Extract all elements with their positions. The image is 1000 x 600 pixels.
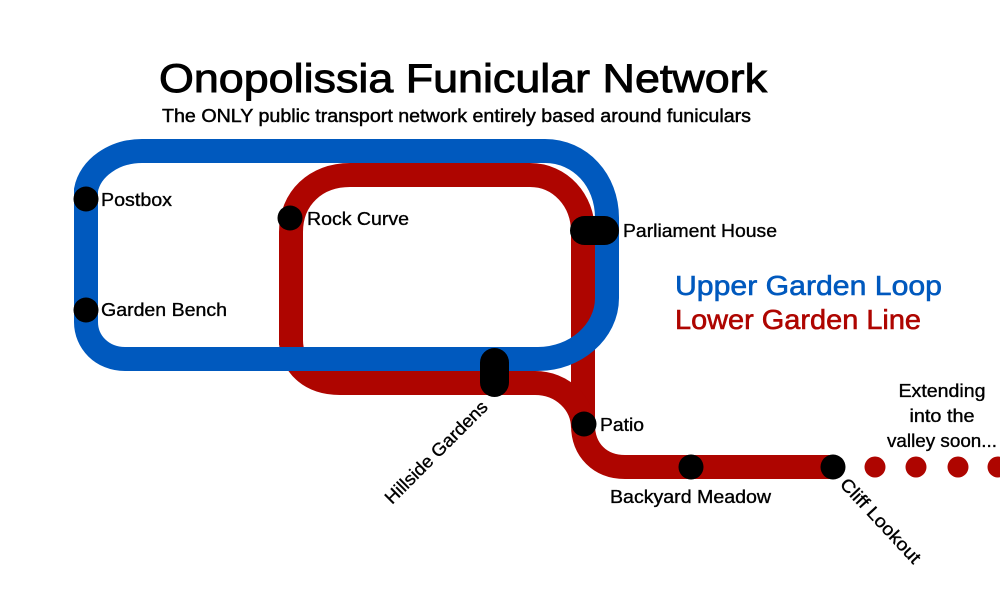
station: Hillside Gardens xyxy=(381,348,509,508)
station: Garden Bench xyxy=(74,298,227,322)
extension note: valley soon... xyxy=(887,431,997,451)
station: Parliament House xyxy=(570,216,777,245)
station: Postbox xyxy=(74,186,172,212)
extension note: Extending xyxy=(898,381,986,401)
extension note xyxy=(887,381,997,451)
lower garden line: red route xyxy=(291,175,833,467)
title: Onopolissia Funicular Network xyxy=(159,57,768,101)
subtitle: The ONLY public transport network entirely based around funiculars xyxy=(162,106,751,126)
station: Garden Bench: Garden Bench xyxy=(101,300,227,320)
legend: Upper Garden Loop xyxy=(675,270,942,301)
station: Cliff Lookout xyxy=(820,454,925,567)
station: Patio xyxy=(572,412,644,436)
upper garden loop: blue route xyxy=(86,151,607,359)
station: Cliff Lookout: Cliff Lookout xyxy=(836,474,925,567)
station: Rock Curve xyxy=(278,206,409,230)
station: Rock Curve: Rock Curve xyxy=(307,209,409,229)
station: Hillside Gardens: Hillside Gardens xyxy=(381,397,492,508)
legend xyxy=(675,270,942,335)
station: Parliament House: Parliament House xyxy=(623,221,777,241)
legend: Lower Garden Line xyxy=(675,304,921,335)
station: Postbox: Postbox xyxy=(101,190,172,210)
extension dots xyxy=(864,456,1000,478)
station: Backyard Meadow: Backyard Meadow xyxy=(610,487,772,507)
station: Backyard Meadow xyxy=(610,454,772,507)
station: Patio: Patio xyxy=(600,415,644,435)
extension note: into the xyxy=(910,406,974,426)
